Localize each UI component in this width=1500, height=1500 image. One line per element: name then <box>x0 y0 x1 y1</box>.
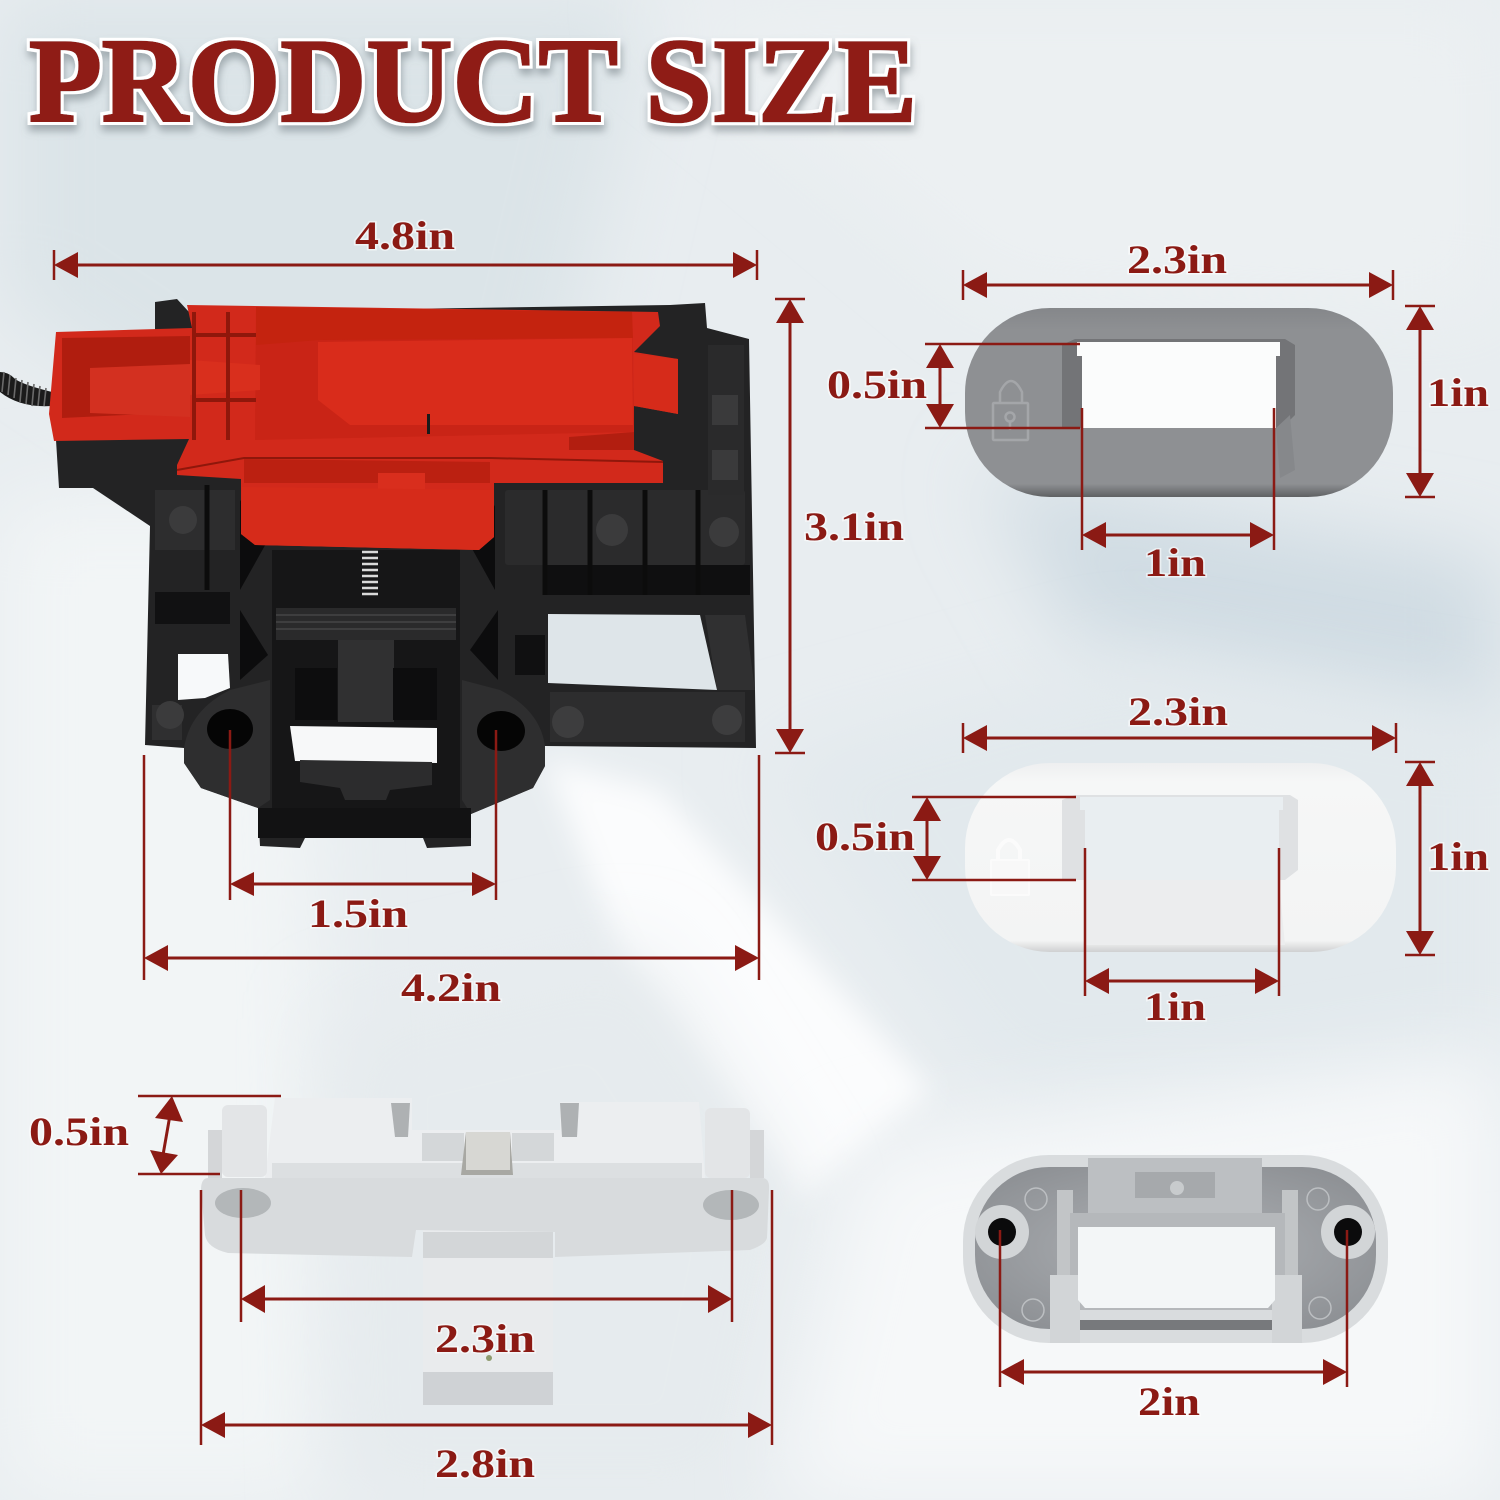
dimension: 2.8in catch width <box>201 1190 772 1486</box>
dimension: 2.3in white plate width <box>963 689 1396 753</box>
dimension: 1in grey plate height: 1in <box>1427 370 1489 415</box>
red slider body <box>49 305 678 550</box>
dimension: 3.1in height <box>775 299 904 753</box>
dimension: 1in white plate height: 1in <box>1427 834 1489 879</box>
main door latch: black base with red slider <box>0 299 756 848</box>
dimension: 2in rear hole spacing: 2in <box>1138 1379 1200 1424</box>
cable spring <box>0 372 52 406</box>
white strike plate <box>965 763 1396 952</box>
dimension: 0.5in white window height: 0.5in <box>815 814 915 859</box>
screw bosses <box>975 1205 1029 1259</box>
front bar <box>201 1178 769 1257</box>
dimension: 2.3in grey plate width <box>963 237 1393 300</box>
dimension: 1in white plate height <box>1405 762 1489 955</box>
opening <box>1078 1227 1275 1308</box>
dimension: 2.3in catch hole spacing <box>241 1190 732 1361</box>
window openings <box>548 614 717 690</box>
centre slider <box>272 550 460 812</box>
dimension: 0.5in catch height: 0.5in <box>29 1109 129 1154</box>
red slider details <box>62 307 678 550</box>
metal clip <box>461 1132 513 1175</box>
dimension: 0.5in white window height <box>815 797 1076 880</box>
dimension: 4.8in overall length: 4.8in <box>355 213 455 258</box>
dimension: 2.3in grey plate width: 2.3in <box>1127 237 1227 282</box>
dimension: 1in white window width: 1in <box>1144 984 1206 1029</box>
dimension: 1in white window width <box>1085 848 1279 1029</box>
frame ribs and bosses <box>152 345 755 742</box>
dimension: 4.2in base width <box>144 755 759 1010</box>
dimension: 2.3in catch hole spacing: 2.3in <box>435 1316 535 1361</box>
grey strike plate <box>965 308 1393 497</box>
dimension: 0.5in grey window height <box>827 344 1080 428</box>
dimension: 1in grey window width <box>1082 408 1274 585</box>
dimension: 1.5in hole spacing: 1.5in <box>308 891 408 936</box>
latch opening <box>290 726 437 763</box>
lock icon <box>993 381 1028 440</box>
dimension: 2in rear hole spacing <box>1000 1230 1347 1424</box>
dimension: 2.3in white plate width: 2.3in <box>1128 689 1228 734</box>
tongue <box>423 1230 553 1405</box>
strike plate rear view <box>963 1155 1388 1343</box>
title: PRODUCT SIZE <box>29 14 917 147</box>
dimension: 4.8in overall length <box>54 213 757 280</box>
mounting ears <box>184 680 270 808</box>
dimension: 3.1in height: 3.1in <box>804 504 904 549</box>
diagonal rib triangles <box>240 500 545 680</box>
dimension: 1.5in hole spacing <box>230 730 496 936</box>
dimension: 4.2in base width: 4.2in <box>401 965 501 1010</box>
spring <box>362 552 378 594</box>
black plastic frame <box>56 299 756 848</box>
upper body <box>265 1098 705 1178</box>
dimension: 1in grey plate height <box>1405 306 1489 497</box>
lock icon <box>991 840 1029 895</box>
dimension: 0.5in catch height <box>29 1096 281 1174</box>
dimension: 0.5in grey window height: 0.5in <box>827 362 927 407</box>
dimension: 2.8in catch width: 2.8in <box>435 1441 535 1486</box>
white catch bracket <box>201 1098 769 1405</box>
dimension: 1in grey window width: 1in <box>1144 540 1206 585</box>
